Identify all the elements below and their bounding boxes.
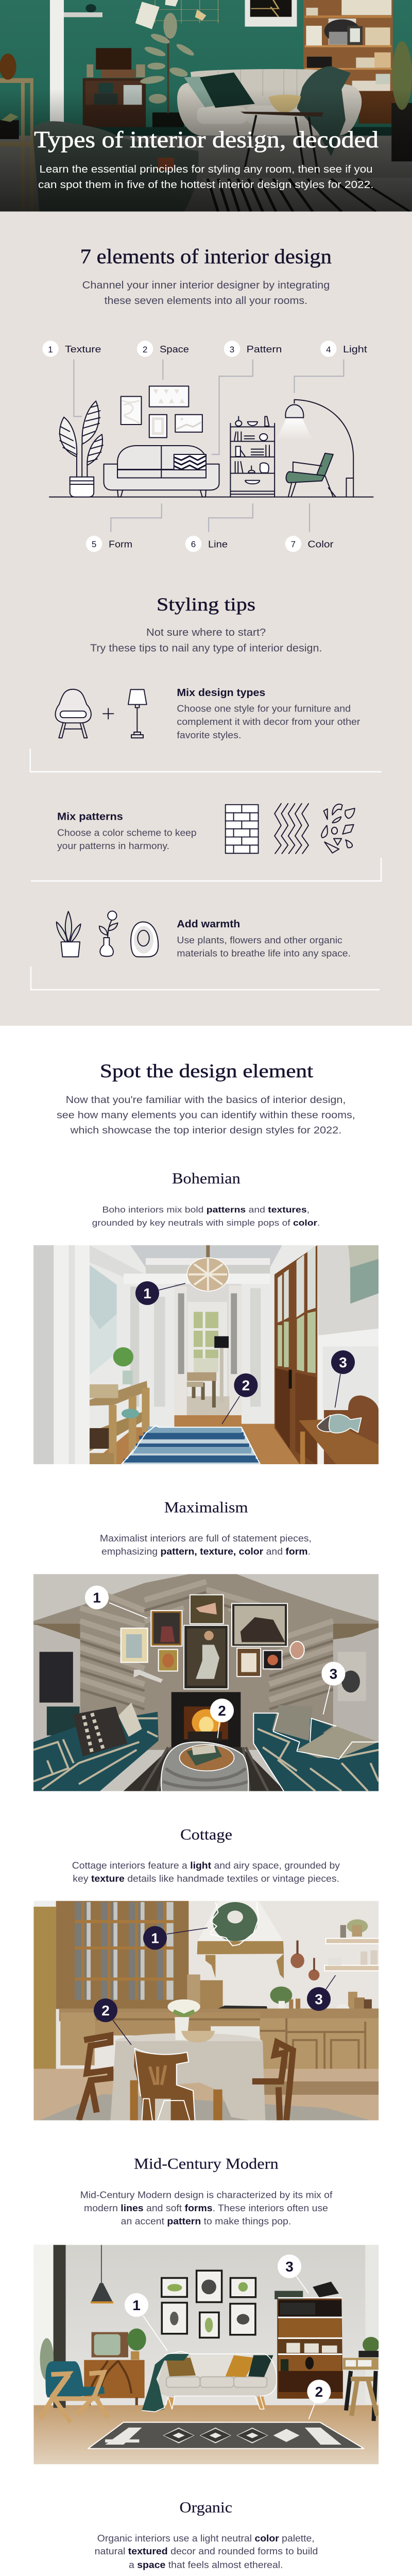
photo: bohemian entry hall (33, 1245, 379, 1464)
text: mix design types: complement it with decor from your other (177, 717, 360, 727)
section: mid-century modern (33, 2155, 380, 2464)
heading: title: Types of interior design, decoded (34, 126, 379, 152)
marker: cottage callout 2 (94, 1998, 131, 2045)
icon: brick, zigzag and terrazzo patterns (226, 804, 355, 854)
label: 2 Space: 2 (143, 345, 147, 354)
text: organic description (95, 2533, 318, 2570)
heading: spot the design element: Spot the design element (100, 1061, 314, 1082)
label: 6 Line: Line (208, 539, 228, 549)
label: 6 Line (185, 536, 228, 552)
text: maximalism description: Maximalist interiors are full of statement pieces, (100, 1533, 312, 1544)
photo: mid-century living room (33, 2245, 380, 2464)
text: elements intro: these seven elements into all your rooms. (105, 295, 307, 307)
marker: mid-century callout 3: 3 (285, 2259, 294, 2275)
text: styling tips intro (90, 627, 322, 654)
text: mix patterns (57, 811, 197, 851)
marker: mid-century callout 3 (278, 2255, 309, 2294)
marker: mid-century callout 2: 2 (315, 2384, 323, 2400)
text: hero intro: Learn the essential principles for styling any room, then see if you (39, 163, 373, 175)
text: add warmth: materials to breathe life into any space. (177, 948, 351, 959)
label: 5 Form: Form (109, 539, 132, 549)
marker: cottage callout 1: 1 (151, 1930, 159, 1946)
text: hero intro: can spot them in five of the hottest interior design styles for 2022. (38, 179, 374, 191)
text: bohemian description: Boho interiors mix bold patterns and textures , (102, 1205, 310, 1214)
text: mix design types (177, 687, 360, 740)
text: maximalism description (100, 1533, 312, 1557)
text: cottage description: key texture details like handmade textiles or vintage pieces. (73, 1874, 339, 1884)
text: hero intro (38, 163, 374, 191)
section: organic (95, 2502, 317, 2570)
tip: add warmth (57, 911, 351, 959)
label: 2 Space: Space (160, 344, 189, 354)
panel: spot the design element intro (57, 1061, 355, 1136)
marker: bohemian callout 3: 3 (339, 1354, 347, 1370)
label: 4 Light (320, 341, 367, 357)
text: styling tips intro: Try these tips to nail any type of interior design. (90, 642, 322, 654)
marker: maximalism callout 3: 3 (330, 1666, 337, 1682)
hero photo: green living room (0, 0, 412, 212)
text: bohemian description: grounded by key neutrals with simple pops of color . (92, 1218, 320, 1228)
text: styling tips intro: Not sure where to start? (146, 627, 266, 638)
label: 1 Texture: 1 (48, 345, 53, 354)
text: mix design types: favorite styles. (177, 730, 241, 740)
text: spot intro: see how many elements you can identify within these rooms, (57, 1110, 355, 1121)
label: 5 Form: 5 (92, 539, 96, 549)
text: organic description: Organic interiors use a light neutral color palette, (97, 2533, 315, 2544)
photo: cottage kitchen (33, 1901, 379, 2120)
text: mid-century description: Mid-Century Modern design is characterized by its mix of (80, 2190, 333, 2200)
text: mix patterns: Choose a color scheme to keep (57, 828, 197, 838)
text: mid-century description: an accent pattern to make things pop. (121, 2216, 291, 2227)
heading: mid-century modern: Mid-Century Modern (134, 2155, 279, 2172)
text: maximalism description: emphasizing pattern, texture, color and form. (101, 1547, 311, 1557)
panel: 7 elements of interior design (42, 245, 373, 552)
photo: maximalism wood-clad lounge (33, 1574, 379, 1791)
icon: plant, flower and vase (57, 911, 158, 957)
tip: mix patterns (57, 804, 355, 854)
label: 6 Line: 6 (191, 539, 196, 549)
marker: bohemian callout 1: 1 (143, 1285, 151, 1301)
marker: maximalism callout 1: 1 (93, 1590, 101, 1606)
label: 7 Color (285, 536, 334, 552)
text: spot intro: which showcase the top interior design styles for 2022. (70, 1125, 341, 1136)
label: 7 Color: 7 (291, 539, 296, 549)
marker: maximalism callout 1 (85, 1586, 147, 1618)
marker: cottage callout 2: 2 (101, 2003, 110, 2019)
text: elements intro: Channel your inner interior designer by integrating (82, 280, 330, 291)
icon: chair plus lamp (55, 689, 147, 738)
marker: cottage callout 1 (143, 1926, 208, 1950)
marker: cottage callout 3: 3 (315, 1991, 323, 2007)
label: 5 Form (86, 536, 132, 552)
label: 7 Color: Color (307, 539, 334, 549)
text: cottage description (72, 1860, 340, 1884)
marker: mid-century callout 1 (125, 2293, 167, 2351)
text: organic description: a space that feels almost ethereal. (129, 2560, 283, 2570)
hero banner (0, 0, 412, 212)
heading: cottage: Cottage (180, 1826, 232, 1843)
text: mix design types: Choose one style for your furniture and (177, 704, 351, 714)
marker: cottage callout 3 (307, 1975, 336, 2011)
heading: bohemian: Bohemian (172, 1170, 241, 1187)
marker: bohemian callout 2 (222, 1374, 258, 1424)
text: bohemian description (92, 1205, 320, 1228)
marker: maximalism callout 2 (210, 1699, 234, 1738)
section: maximalism (33, 1499, 379, 1791)
text: spot intro: Now that you're familiar with the basics of interior design, (66, 1095, 346, 1106)
text: mix patterns: Mix patterns (57, 811, 123, 822)
text: mix patterns: your patterns in harmony. (57, 841, 169, 851)
marker: mid-century callout 1: 1 (132, 2297, 141, 2313)
marker: maximalism callout 2: 2 (218, 1703, 226, 1719)
panel: beige background (0, 212, 412, 1026)
text: organic description: natural textured decor and rounded forms to build (95, 2546, 318, 2556)
label: 1 Texture (42, 341, 101, 357)
marker: bohemian callout 3 (331, 1350, 355, 1408)
label: 1 Texture: Texture (65, 344, 101, 354)
panel: styling tips (30, 594, 382, 990)
label: 4 Light: 4 (326, 345, 331, 354)
heading: styling tips: Styling tips (157, 594, 255, 615)
label: 3 Pattern (224, 341, 282, 357)
text: add warmth: Use plants, flowers and other organic (177, 935, 342, 945)
text: mix design types: Mix design types (177, 687, 265, 699)
heading: 7 elements: 7 elements of interior design (80, 245, 332, 268)
text: add warmth: Add warmth (177, 919, 240, 930)
marker: bohemian callout 2: 2 (242, 1378, 250, 1394)
heading: maximalism: Maximalism (164, 1499, 248, 1516)
section: cottage (33, 1826, 379, 2120)
text: spot intro (57, 1095, 355, 1136)
label: 3 Pattern: Pattern (247, 344, 282, 354)
tip: mix design types (55, 687, 360, 740)
marker: maximalism callout 3 (321, 1662, 345, 1715)
label: 3 Pattern: 3 (230, 345, 234, 354)
heading: organic: Organic (179, 2499, 232, 2516)
text: elements intro (82, 280, 330, 307)
label: 4 Light: Light (343, 344, 367, 354)
text: cottage description: Cottage interiors feature a light and airy space, grounded by (72, 1860, 340, 1871)
marker: mid-century callout 2 (307, 2380, 331, 2419)
marker: bohemian callout 1 (135, 1281, 185, 1305)
text: mid-century description (80, 2190, 333, 2227)
label: 2 Space (137, 341, 189, 357)
text: mid-century description: modern lines and soft forms. These interiors often use (84, 2203, 328, 2213)
section: bohemian (33, 1170, 379, 1464)
illustration: living room line art (49, 360, 373, 532)
text: add warmth (177, 919, 351, 959)
